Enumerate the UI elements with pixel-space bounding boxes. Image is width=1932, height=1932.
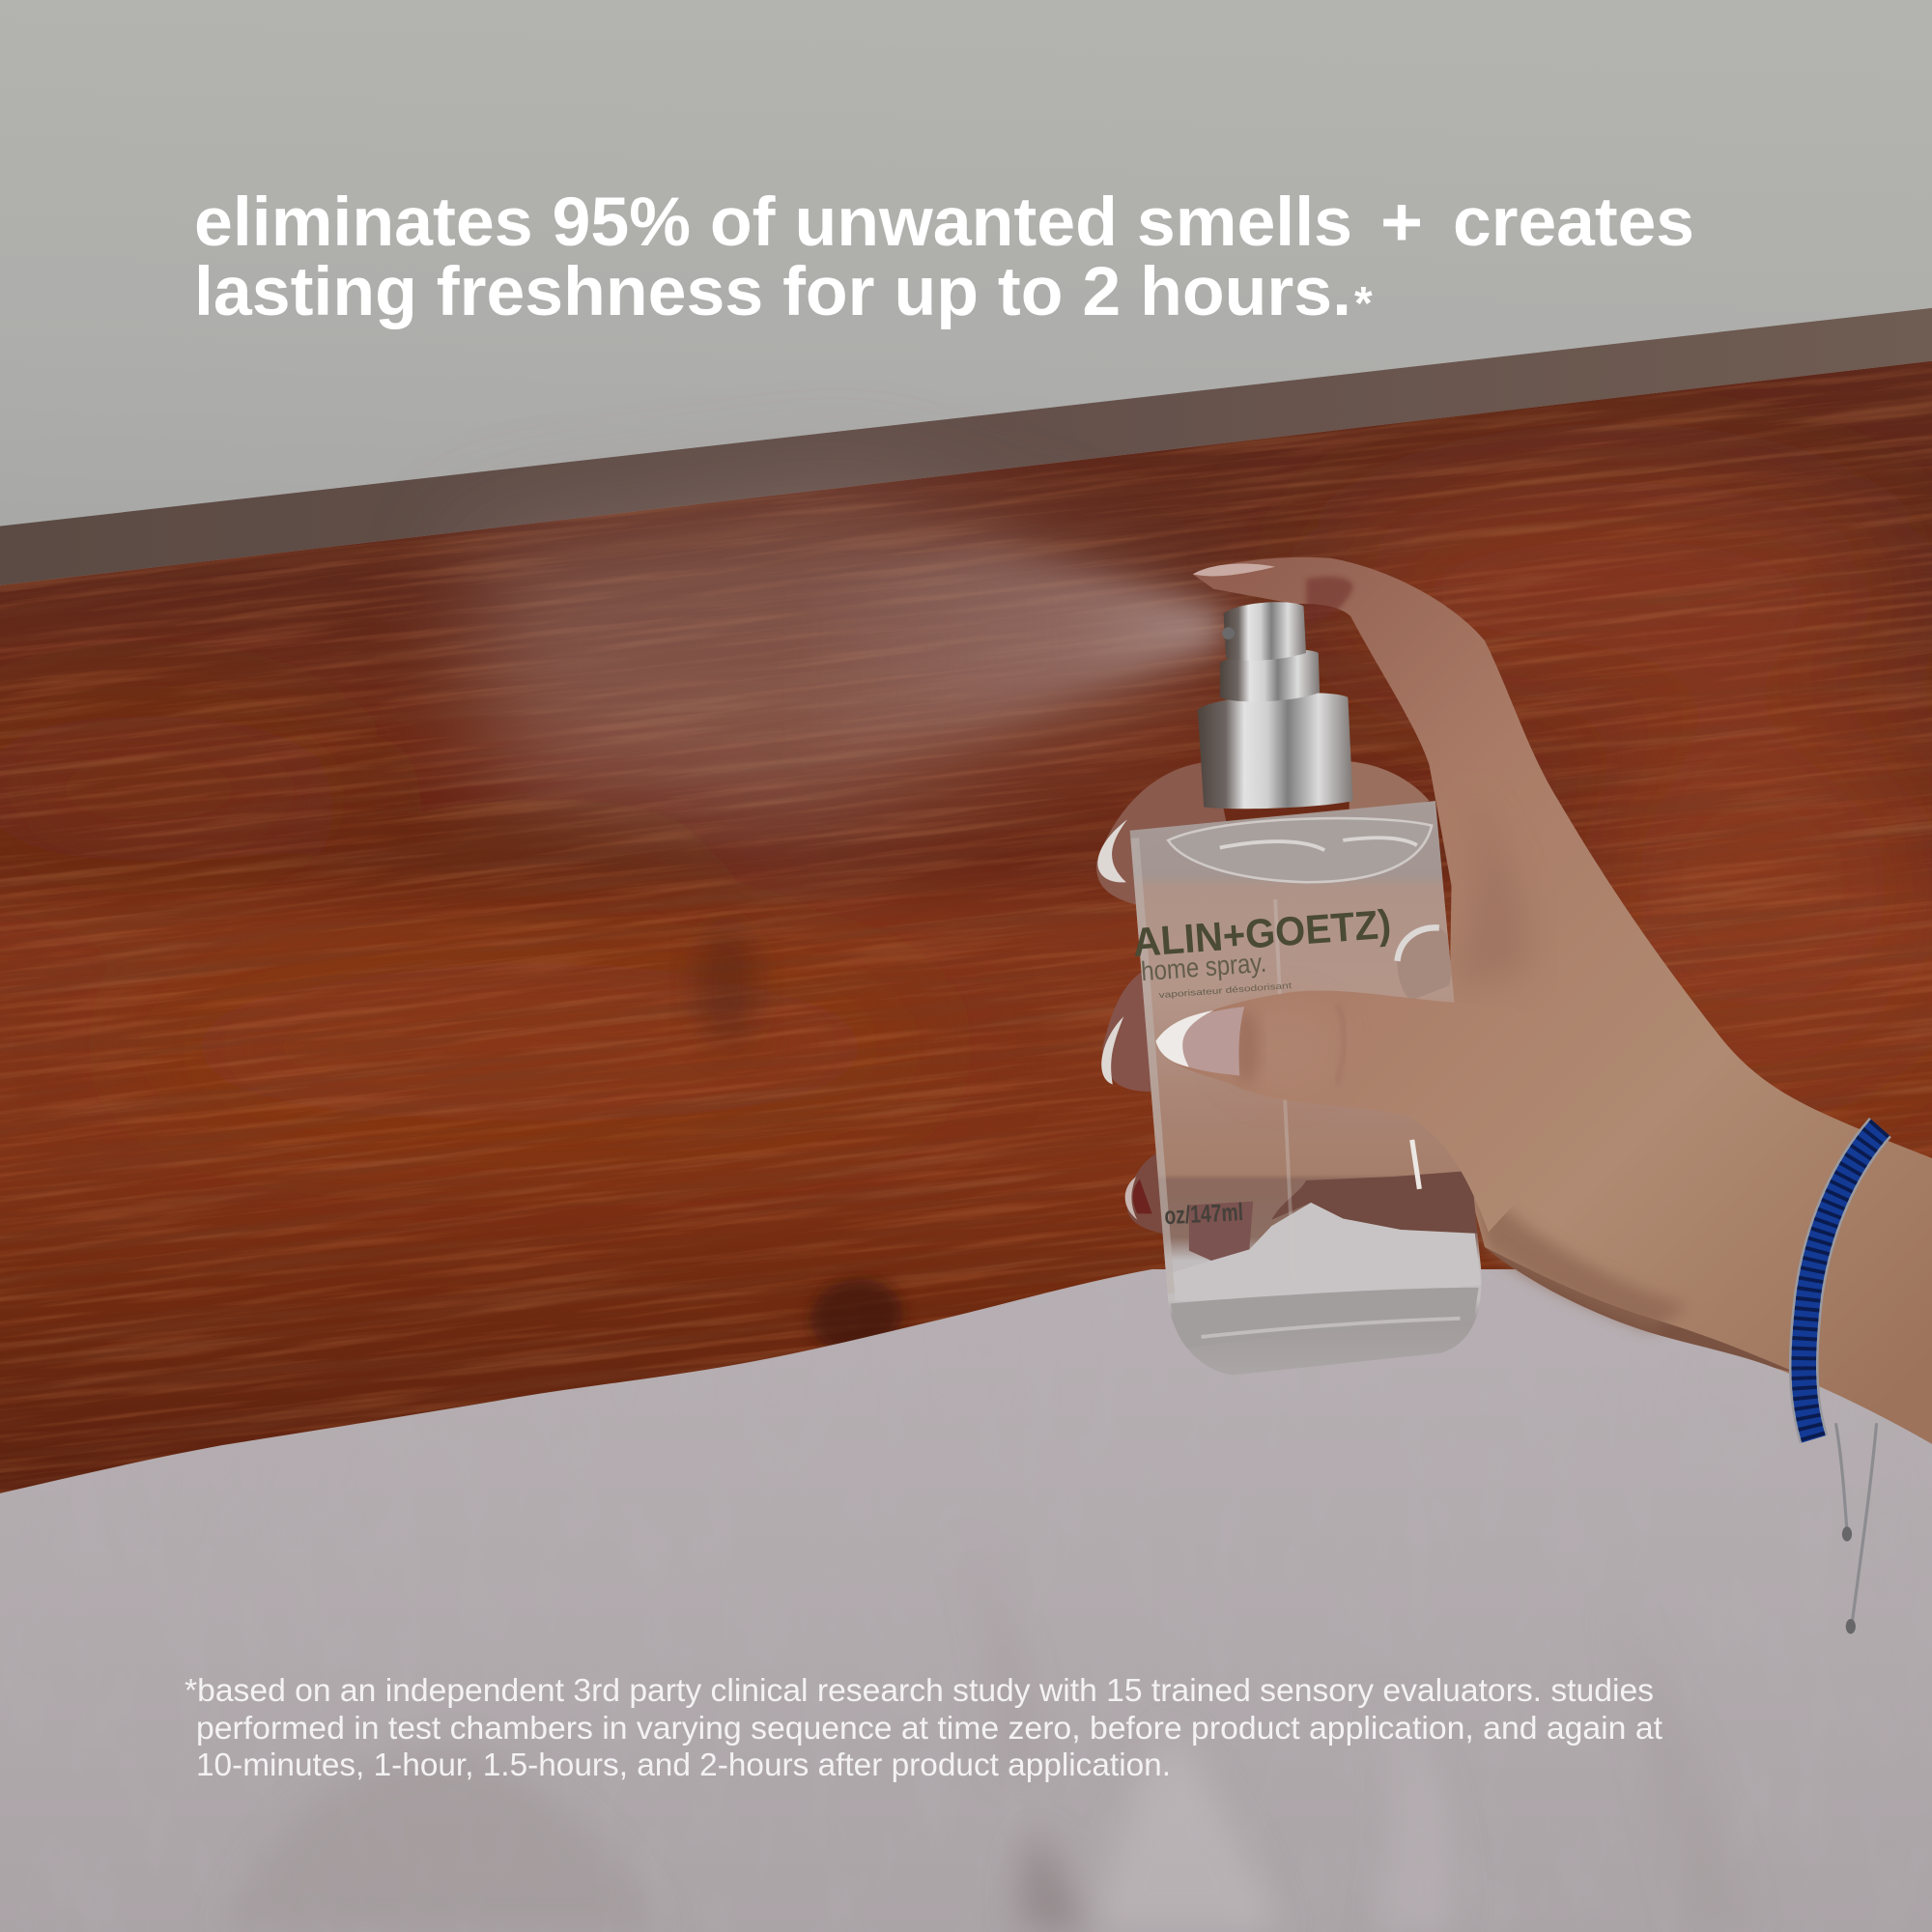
glass highlights and refractions bbox=[1135, 818, 1481, 1350]
hand and arm bbox=[1193, 557, 1932, 1444]
wooden headboard bbox=[0, 361, 1932, 1493]
wall bbox=[0, 0, 1932, 591]
bottle label: vaporisateur désodorisant bbox=[1158, 980, 1293, 1000]
headline: creates bbox=[1453, 185, 1694, 261]
headline: * bbox=[1354, 278, 1373, 329]
bottle label: home spray. bbox=[1140, 948, 1267, 986]
bottle glass bbox=[1130, 801, 1482, 1375]
footnote: performed in test chambers in varying sequence at time zero, before product application, and again at bbox=[196, 1710, 1662, 1746]
bedding bbox=[0, 1269, 1932, 1932]
footnote: *based on an independent 3rd party clinical research study with 15 trained sensory evaluators. studies bbox=[185, 1672, 1654, 1708]
perfume bottle bbox=[1130, 801, 1482, 1375]
headline: eliminates 95% of unwanted smells bbox=[194, 185, 1352, 261]
bracelet chains bbox=[1836, 1423, 1877, 1634]
bottle label: ALIN+GOETZ) bbox=[1131, 901, 1393, 965]
thumb bbox=[1155, 990, 1602, 1233]
headline: lasting freshness for up to 2 hours. bbox=[194, 254, 1351, 330]
spray mist bbox=[469, 487, 1224, 838]
silver pump cap bbox=[1198, 602, 1353, 809]
headline: + bbox=[1380, 185, 1423, 261]
headline bbox=[194, 185, 1694, 330]
bottle volume: oz/147ml bbox=[1164, 1199, 1244, 1230]
blue bracelet bbox=[1804, 1127, 1880, 1634]
hand fingers behind bottle bbox=[1096, 761, 1430, 1236]
footnote: 10-minutes, 1-hour, 1.5-hours, and 2-hours after product application. bbox=[196, 1747, 1171, 1782]
footnote bbox=[185, 1672, 1662, 1782]
headboard ledge bbox=[0, 308, 1932, 585]
bottle label bbox=[1131, 901, 1395, 1002]
